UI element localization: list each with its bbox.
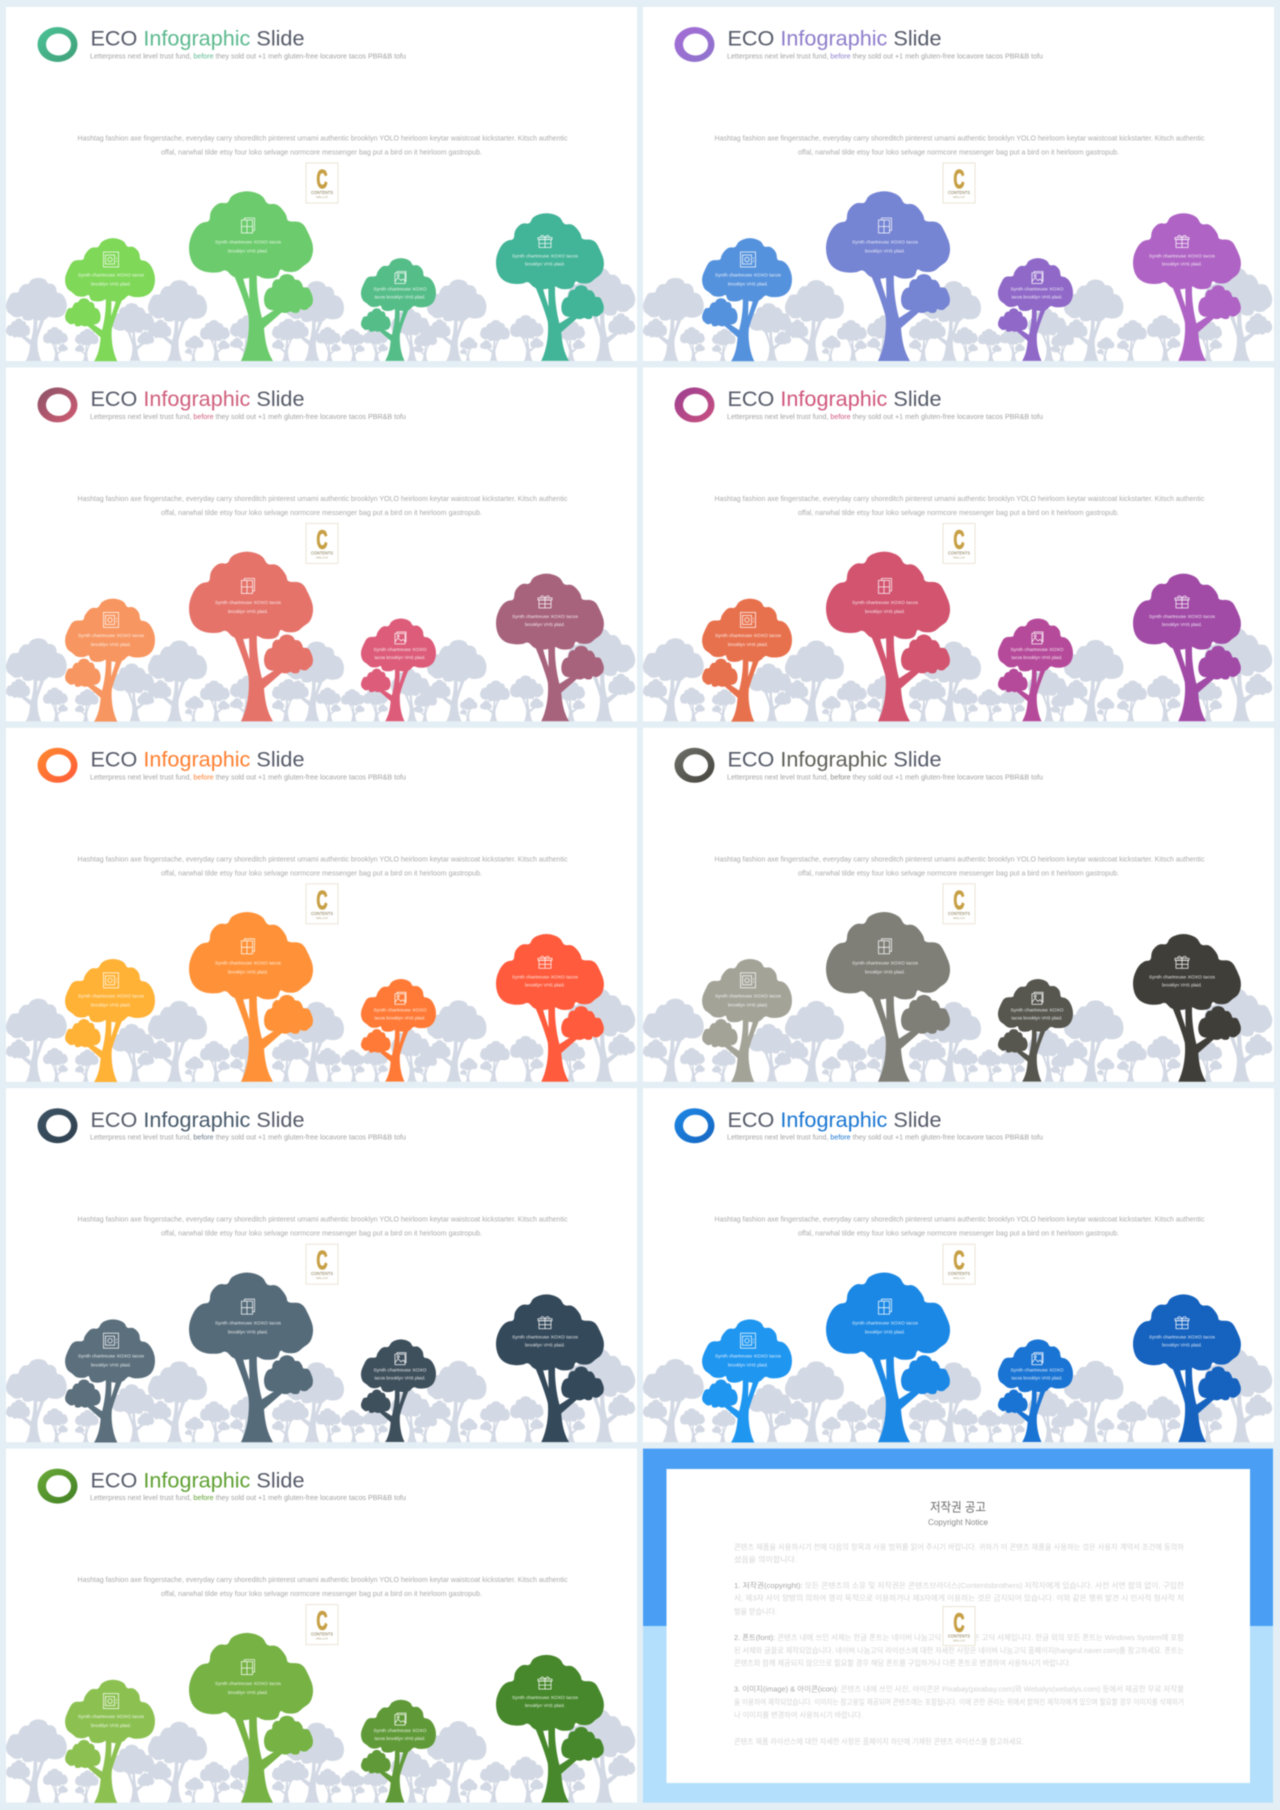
notice section 3 image and icon: 을 이용하여 제작되었습니다. 이미지는 참고용일 제공되며 콘텐츠에는 포함됩니다. 이에 관한 권리는 위에서 밝혀진 제작자에게 있으며 필요할 경우 이미지를 삭제하거 xyxy=(734,1697,1184,1707)
tree 1: brooklyn VHS plaid. xyxy=(728,1363,768,1369)
title: ECO Infographic Slide xyxy=(728,1108,942,1132)
tree 4 xyxy=(496,574,604,721)
notice heading: 저작권 공고 xyxy=(930,1501,986,1515)
body paragraph xyxy=(714,1215,1205,1238)
tree 1: brooklyn VHS plaid. xyxy=(728,642,768,648)
tree 1: Synth chartreuse XOXO tacos xyxy=(715,1354,782,1360)
title: ECO Infographic Slide xyxy=(90,1108,304,1132)
tree 3: Synth chartreuse XOXO xyxy=(374,1007,427,1013)
tree 2: brooklyn VHS plaid. xyxy=(228,1330,268,1336)
tree 4: Synth chartreuse XOXO tacos xyxy=(1149,254,1216,260)
tree 1: Synth chartreuse XOXO tacos xyxy=(715,993,782,999)
background forest xyxy=(643,1349,1272,1442)
body paragraph: Hashtag fashion axe fingerstache, everyday carry shoreditch pinterest umami authentic brooklyn YOLO heirloom keytar waistcoat kickstarter. Kitsch authentic xyxy=(78,1575,568,1584)
title: ECO Infographic Slide xyxy=(728,27,942,51)
panel: slide 2 purple xyxy=(643,7,1274,361)
contents logo badge: CONTENTS xyxy=(311,1632,333,1637)
tree 3: tacos brooklyn VHS plaid. xyxy=(374,655,426,661)
contents logo badge: WALL LUX xyxy=(316,196,328,199)
notice section 1 copyright xyxy=(734,1580,1184,1616)
background forest xyxy=(643,268,1272,361)
notice heading: Copyright Notice xyxy=(928,1517,988,1527)
notice section 2 font: 콘텐츠와 함께 제공되지 않으므로 필요할 경우 해당 폰트를 구입하거나 다른 폰트로 변경하여 사용하시기 바랍니다. xyxy=(734,1658,1071,1668)
body paragraph xyxy=(714,854,1205,877)
contents logo badge: CONTENTS xyxy=(948,1634,970,1639)
notice section 1 copyright: 사, 제3자 사이 양방의 의하여 영리 목적으로 이용하거나 제3자에게 이용하는 것은 금지되어 있습니다. 이와 같은 행위 발견 시 민사적 형사적 처 xyxy=(734,1593,1184,1603)
contents logo badge: CONTENTS xyxy=(311,1271,333,1276)
tree 3 xyxy=(361,258,436,361)
icon: ring logo xyxy=(38,748,78,783)
tree 3: tacos brooklyn VHS plaid. xyxy=(374,1015,426,1021)
panel: slide 3 coral xyxy=(6,367,637,722)
tree 1 xyxy=(65,599,155,722)
tree 3: tacos brooklyn VHS plaid. xyxy=(1012,1015,1062,1021)
contents logo badge: C xyxy=(316,524,328,554)
tree 2: Synth chartreuse XOXO tacos xyxy=(852,600,919,606)
tree 1: Synth chartreuse XOXO tacos xyxy=(715,633,782,639)
body paragraph: Hashtag fashion axe fingerstache, everyday carry shoreditch pinterest umami authentic brooklyn YOLO heirloom keytar waistcoat kickstarter. Kitsch authentic xyxy=(78,494,568,503)
contents logo badge xyxy=(306,1244,338,1284)
tree 1 xyxy=(702,599,792,722)
background forest xyxy=(6,1709,635,1803)
tree 1 xyxy=(65,238,155,361)
tree 1 xyxy=(702,959,792,1082)
tree 2: Synth chartreuse XOXO tacos xyxy=(852,960,919,966)
tree 3: tacos brooklyn VHS plaid. xyxy=(374,294,426,300)
body paragraph: offal, narwhal tilde etsy four loko selvage normcore messenger bag put a bird on it heirloom gastropub. xyxy=(798,1229,1119,1238)
notice intro: 콘텐츠 제품을 사용하시기 전에 다음의 항목과 사용 범위를 읽어 주시기 바랍니다. 귀하가 이 콘텐츠 제품을 사용하는 것은 사용자 계약서 조건에 동의하 xyxy=(734,1542,1184,1552)
tree 2 xyxy=(826,912,950,1082)
tree 2 xyxy=(189,1272,313,1442)
tree 1: brooklyn VHS plaid. xyxy=(728,282,768,288)
tree 4 xyxy=(496,1294,604,1442)
tree 4 xyxy=(1133,574,1241,721)
subtitle: Letterpress next level trust fund, before they sold out +1 meh gluten-free locavore tacos PBR&B tofu xyxy=(90,52,406,60)
tree 3 xyxy=(361,1700,436,1802)
subtitle: Letterpress next level trust fund, before they sold out +1 meh gluten-free locavore tacos PBR&B tofu xyxy=(727,772,1043,781)
body paragraph: offal, narwhal tilde etsy four loko selvage normcore messenger bag put a bird on it heirloom gastropub. xyxy=(161,868,482,877)
contents logo badge: WALL LUX xyxy=(316,556,328,559)
notice intro xyxy=(734,1542,1184,1564)
contents logo badge: C xyxy=(316,1245,328,1275)
tree 1: Synth chartreuse XOXO tacos xyxy=(78,1714,145,1720)
tree 3: Synth chartreuse XOXO xyxy=(374,1728,427,1734)
title: ECO Infographic Slide xyxy=(90,747,304,771)
tree 3: Synth chartreuse XOXO xyxy=(1010,1007,1064,1013)
tree 4: brooklyn VHS plaid. xyxy=(525,262,565,268)
notice section 2 font: 된 서체와 글꼴로 제작되었습니다. 네이버 나눔고딕 라이선스에 대한 자세한 사항은 네이버 나눔고딕 홈페이지(hangeul.naver.com)를 참고하세요. 폰트는 xyxy=(734,1645,1184,1655)
tree 2: Synth chartreuse XOXO tacos xyxy=(852,240,919,246)
body paragraph xyxy=(714,134,1205,156)
icon: ring logo xyxy=(674,387,714,422)
tree 1: brooklyn VHS plaid. xyxy=(91,1723,131,1729)
tree 2 xyxy=(826,1272,950,1442)
background forest xyxy=(6,1349,635,1442)
body paragraph: Hashtag fashion axe fingerstache, everyday carry shoreditch pinterest umami authentic brooklyn YOLO heirloom keytar waistcoat kickstarter. Kitsch authentic xyxy=(714,134,1205,142)
contents logo badge: WALL LUX xyxy=(316,917,328,920)
title: ECO Infographic Slide xyxy=(90,387,304,411)
tree 3 xyxy=(361,619,436,721)
tree 2: Synth chartreuse XOXO tacos xyxy=(215,1321,282,1327)
panel: slide 6 grey xyxy=(643,728,1274,1082)
tree 4: brooklyn VHS plaid. xyxy=(1162,1343,1202,1349)
body paragraph: offal, narwhal tilde etsy four loko selvage normcore messenger bag put a bird on it heirloom gastropub. xyxy=(161,1229,482,1238)
tree 3 xyxy=(998,979,1073,1082)
tree 2: brooklyn VHS plaid. xyxy=(865,969,905,975)
notice section 3 image and icon: 나 이미지를 변경하여 사용하시기 바랍니다. xyxy=(734,1710,863,1720)
panel: slide 5 orange xyxy=(6,728,637,1082)
notice section 3 image and icon: 3. 이미지(image) & 아이콘(icon): 콘텐츠 내에 쓰인 사진, 아이콘은 Pixabay(pixabay.com)와 Webalys(webalys.com) 등에서 제공한 무료 저작물 xyxy=(734,1684,1184,1694)
contents logo badge xyxy=(943,884,975,924)
subtitle: Letterpress next level trust fund, before they sold out +1 meh gluten-free locavore tacos PBR&B tofu xyxy=(90,772,406,781)
subtitle: Letterpress next level trust fund, before they sold out +1 meh gluten-free locavore tacos PBR&B tofu xyxy=(727,1133,1043,1142)
notice section 2 font: 2. 폰트(font): 콘텐츠 내에 쓰인 서체는 한글 폰트는 네이버 나눔고딕 서체와 맑은 고딕 서체입니다. 한글 외의 모든 폰트는 Windows System에 포함 xyxy=(734,1632,1184,1642)
tree 1: brooklyn VHS plaid. xyxy=(91,1002,131,1008)
tree 3: tacos brooklyn VHS plaid. xyxy=(374,1376,426,1382)
contents logo badge: C xyxy=(954,524,965,554)
tree 1: brooklyn VHS plaid. xyxy=(728,1002,768,1008)
body paragraph xyxy=(78,854,568,877)
contents logo badge: C xyxy=(954,1608,965,1638)
contents logo badge xyxy=(943,523,975,563)
tree 1: brooklyn VHS plaid. xyxy=(91,282,131,288)
tree 4: brooklyn VHS plaid. xyxy=(525,982,565,988)
contents logo badge: WALL LUX xyxy=(953,917,965,920)
tree 3 xyxy=(998,258,1073,361)
tree 4: brooklyn VHS plaid. xyxy=(1162,622,1202,628)
icon: ring logo xyxy=(674,1108,714,1143)
contents logo badge: CONTENTS xyxy=(311,190,333,195)
title: ECO Infographic Slide xyxy=(90,27,304,51)
contents logo badge xyxy=(943,163,975,203)
subtitle: Letterpress next level trust fund, before they sold out +1 meh gluten-free locavore tacos PBR&B tofu xyxy=(90,412,406,421)
tree 4: brooklyn VHS plaid. xyxy=(1162,262,1202,268)
tree 4 xyxy=(496,934,604,1082)
notice section 1 copyright: 벌을 받습니다. xyxy=(734,1606,777,1616)
icon: ring logo xyxy=(674,748,714,783)
tree 2: Synth chartreuse XOXO tacos xyxy=(215,600,282,606)
tree 2 xyxy=(189,191,313,361)
tree 3 xyxy=(998,1339,1073,1442)
subtitle: Letterpress next level trust fund, before they sold out +1 meh gluten-free locavore tacos PBR&B tofu xyxy=(727,52,1043,60)
subtitle: Letterpress next level trust fund, before they sold out +1 meh gluten-free locavore tacos PBR&B tofu xyxy=(727,412,1043,421)
tree 2 xyxy=(189,912,313,1082)
tree 2: Synth chartreuse XOXO tacos xyxy=(215,960,282,966)
body paragraph: Hashtag fashion axe fingerstache, everyday carry shoreditch pinterest umami authentic brooklyn YOLO heirloom keytar waistcoat kickstarter. Kitsch authentic xyxy=(714,854,1205,863)
subtitle: Letterpress next level trust fund, before they sold out +1 meh gluten-free locavore tacos PBR&B tofu xyxy=(90,1133,406,1142)
contents logo badge: CONTENTS xyxy=(948,1271,970,1276)
notice closing line: 콘텐츠 제품 라이선스에 대한 자세한 사항은 홈페이지 하단에 기재된 콘텐츠 라이선스를 참고하세요. xyxy=(734,1736,1024,1746)
panel: slide 8 blue xyxy=(643,1088,1274,1442)
contents logo badge: WALL LUX xyxy=(316,1277,328,1280)
contents logo badge: C xyxy=(316,1606,328,1636)
tree 3: Synth chartreuse XOXO xyxy=(1010,647,1064,653)
body paragraph: offal, narwhal tilde etsy four loko selvage normcore messenger bag put a bird on it heirloom gastropub. xyxy=(798,508,1119,517)
tree 1 xyxy=(65,959,155,1082)
body paragraph: offal, narwhal tilde etsy four loko selvage normcore messenger bag put a bird on it heirloom gastropub. xyxy=(161,1589,482,1598)
icon: ring logo xyxy=(38,387,78,422)
notice heading xyxy=(928,1501,988,1527)
tree 4: brooklyn VHS plaid. xyxy=(525,1703,565,1709)
tree 2: brooklyn VHS plaid. xyxy=(865,248,905,254)
tree 4: Synth chartreuse XOXO tacos xyxy=(1149,614,1216,620)
contents logo badge: WALL LUX xyxy=(953,1640,965,1643)
tree 3: Synth chartreuse XOXO xyxy=(374,1368,427,1374)
background forest xyxy=(6,268,635,361)
contents logo badge: C xyxy=(954,1245,965,1275)
tree 2: Synth chartreuse XOXO tacos xyxy=(852,1321,919,1327)
contents logo badge: C xyxy=(954,885,965,915)
contents logo badge: C xyxy=(316,885,328,915)
tree 4 xyxy=(1133,213,1241,361)
subtitle: Letterpress next level trust fund, before they sold out +1 meh gluten-free locavore tacos PBR&B tofu xyxy=(90,1493,406,1502)
background forest xyxy=(6,628,635,721)
tree 3: tacos brooklyn VHS plaid. xyxy=(1012,655,1062,661)
background forest xyxy=(643,988,1272,1082)
tree 4: brooklyn VHS plaid. xyxy=(525,1343,565,1349)
tree 3: tacos brooklyn VHS plaid. xyxy=(1012,294,1062,300)
contents logo badge xyxy=(306,523,338,563)
tree 2 xyxy=(189,552,313,721)
tree 4: Synth chartreuse XOXO tacos xyxy=(1149,1335,1216,1341)
tree 4: Synth chartreuse XOXO tacos xyxy=(1149,974,1216,980)
tree 4: Synth chartreuse XOXO tacos xyxy=(512,1695,579,1701)
tree 4 xyxy=(496,213,604,361)
tree 1 xyxy=(702,238,792,361)
body paragraph: Hashtag fashion axe fingerstache, everyday carry shoreditch pinterest umami authentic brooklyn YOLO heirloom keytar waistcoat kickstarter. Kitsch authentic xyxy=(714,1215,1205,1224)
tree 1: Synth chartreuse XOXO tacos xyxy=(715,272,782,278)
tree 2 xyxy=(826,552,950,721)
tree 1: Synth chartreuse XOXO tacos xyxy=(78,993,145,999)
tree 4: Synth chartreuse XOXO tacos xyxy=(512,1335,579,1341)
background forest xyxy=(6,988,635,1082)
contents logo badge: C xyxy=(954,164,965,194)
contents logo badge: C xyxy=(316,164,328,194)
notice section 1 copyright: 1. 저작권(copyright): 모든 콘텐츠의 소유 및 저작권은 콘텐츠브라더스(Contentsbrothers) 저작자에게 있습니다. 사전 서면 합의 없이, 구입한 xyxy=(734,1580,1184,1590)
tree 3: Synth chartreuse XOXO xyxy=(374,286,427,292)
tree 2: brooklyn VHS plaid. xyxy=(228,248,268,254)
tree 4: brooklyn VHS plaid. xyxy=(1162,982,1202,988)
body paragraph: offal, narwhal tilde etsy four loko selvage normcore messenger bag put a bird on it heirloom gastropub. xyxy=(798,148,1119,156)
body paragraph: offal, narwhal tilde etsy four loko selvage normcore messenger bag put a bird on it heirloom gastropub. xyxy=(161,148,482,156)
tree 1: Synth chartreuse XOXO tacos xyxy=(78,633,145,639)
notice section 3 image and icon xyxy=(734,1684,1184,1720)
icon: ring logo xyxy=(38,1469,78,1504)
tree 4: Synth chartreuse XOXO tacos xyxy=(512,974,579,980)
contents logo badge xyxy=(306,163,338,203)
contents logo badge: CONTENTS xyxy=(948,550,970,555)
title: ECO Infographic Slide xyxy=(90,1468,304,1492)
contents logo badge: WALL LUX xyxy=(953,556,965,559)
panel: copyright notice xyxy=(643,1449,1273,1803)
contents logo badge: CONTENTS xyxy=(948,911,970,916)
tree 3: Synth chartreuse XOXO xyxy=(1010,1368,1064,1374)
body paragraph xyxy=(714,494,1205,517)
body paragraph xyxy=(78,494,568,517)
contents logo badge: CONTENTS xyxy=(948,190,970,195)
title: ECO Infographic Slide xyxy=(728,747,942,771)
tree 3: tacos brooklyn VHS plaid. xyxy=(1012,1376,1062,1382)
tree 4: Synth chartreuse XOXO tacos xyxy=(512,614,579,620)
tree 2: brooklyn VHS plaid. xyxy=(865,1330,905,1336)
tree 1 xyxy=(65,1680,155,1803)
panel: slide 1 green xyxy=(6,7,637,361)
contents logo badge xyxy=(943,1607,975,1646)
tree 3: Synth chartreuse XOXO xyxy=(1010,286,1064,292)
tree 1: Synth chartreuse XOXO tacos xyxy=(78,272,145,278)
tree 1: Synth chartreuse XOXO tacos xyxy=(78,1354,145,1360)
tree 1: brooklyn VHS plaid. xyxy=(91,642,131,648)
panel: slide 4 magenta xyxy=(643,367,1274,722)
icon: ring logo xyxy=(38,27,78,62)
tree 1: brooklyn VHS plaid. xyxy=(91,1363,131,1369)
body paragraph: Hashtag fashion axe fingerstache, everyday carry shoreditch pinterest umami authentic brooklyn YOLO heirloom keytar waistcoat kickstarter. Kitsch authentic xyxy=(714,494,1205,503)
panel: slide 9 leaf green xyxy=(6,1449,637,1803)
tree 2: brooklyn VHS plaid. xyxy=(228,609,268,615)
title: ECO Infographic Slide xyxy=(728,387,942,411)
icon: ring logo xyxy=(38,1108,78,1143)
icon: ring logo xyxy=(674,27,714,62)
tree 2: brooklyn VHS plaid. xyxy=(865,609,905,615)
body paragraph: offal, narwhal tilde etsy four loko selvage normcore messenger bag put a bird on it heirloom gastropub. xyxy=(161,508,482,517)
body paragraph xyxy=(78,1575,568,1598)
panel: slide 7 slate xyxy=(6,1088,637,1442)
notice intro: 셨음을 의미합니다. xyxy=(734,1554,797,1564)
body paragraph xyxy=(78,134,568,156)
contents logo badge: CONTENTS xyxy=(311,911,333,916)
tree 3: tacos brooklyn VHS plaid. xyxy=(374,1736,426,1742)
tree 1 xyxy=(65,1319,155,1442)
tree 4: Synth chartreuse XOXO tacos xyxy=(512,254,579,260)
contents logo badge: WALL LUX xyxy=(316,1638,328,1641)
tree 4 xyxy=(1133,1294,1241,1442)
tree 3 xyxy=(998,619,1073,721)
tree 4 xyxy=(496,1655,604,1802)
tree 2: Synth chartreuse XOXO tacos xyxy=(215,240,282,246)
contents logo badge xyxy=(306,884,338,924)
contents logo badge: WALL LUX xyxy=(953,196,965,199)
tree 4 xyxy=(1133,934,1241,1082)
contents logo badge: WALL LUX xyxy=(953,1277,965,1280)
tree 3 xyxy=(361,979,436,1082)
contents logo badge: CONTENTS xyxy=(311,550,333,555)
body paragraph: Hashtag fashion axe fingerstache, everyday carry shoreditch pinterest umami authentic brooklyn YOLO heirloom keytar waistcoat kickstarter. Kitsch authentic xyxy=(78,134,568,142)
tree 1 xyxy=(702,1319,792,1442)
contents logo badge xyxy=(943,1244,975,1284)
tree 2: brooklyn VHS plaid. xyxy=(228,1690,268,1696)
body paragraph: Hashtag fashion axe fingerstache, everyday carry shoreditch pinterest umami authentic brooklyn YOLO heirloom keytar waistcoat kickstarter. Kitsch authentic xyxy=(78,1215,568,1224)
tree 3 xyxy=(361,1339,436,1442)
tree 2 xyxy=(826,191,950,361)
background forest xyxy=(643,628,1272,721)
tree 2 xyxy=(189,1633,313,1803)
notice section 2 font xyxy=(734,1632,1184,1668)
tree 4: brooklyn VHS plaid. xyxy=(525,622,565,628)
tree 2: brooklyn VHS plaid. xyxy=(228,969,268,975)
body paragraph: offal, narwhal tilde etsy four loko selvage normcore messenger bag put a bird on it heirloom gastropub. xyxy=(798,868,1119,877)
contents logo badge xyxy=(306,1605,338,1645)
tree 3: Synth chartreuse XOXO xyxy=(374,647,427,653)
body paragraph xyxy=(78,1215,568,1238)
body paragraph: Hashtag fashion axe fingerstache, everyday carry shoreditch pinterest umami authentic brooklyn YOLO heirloom keytar waistcoat kickstarter. Kitsch authentic xyxy=(78,854,568,863)
tree 2: Synth chartreuse XOXO tacos xyxy=(215,1681,282,1687)
